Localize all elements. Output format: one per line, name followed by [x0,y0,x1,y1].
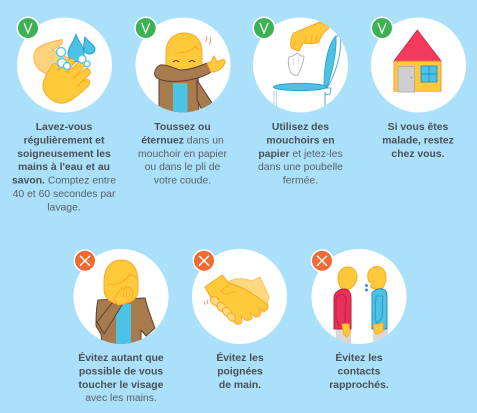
icon: cross badge [192,249,216,272]
panel: avoid close contact [310,249,406,391]
text block: Si vous êtes [388,122,449,133]
text block: dans une poubelle [258,162,343,173]
text block: éternuez dans un [141,135,224,146]
icon: check badge [370,16,394,40]
text block: avec les mains. [85,393,157,404]
icon: check badge [134,16,157,40]
text block: malade, restez [382,135,454,146]
text block: Lavez-vous [36,122,93,133]
panel: cough in elbow [134,16,230,187]
text block [138,122,228,187]
panel: avoid touching face [74,249,168,404]
text block: mains à l'eau et au [18,162,110,173]
text block: poignées [217,366,263,377]
text block: rapprochés. [329,380,389,391]
text block: votre coude. [154,176,211,187]
text block: Évitez autant que [78,351,164,364]
text block: ou dans le pli de [145,162,221,173]
icon: hand dropping tissue into bin [274,22,341,112]
icon: hands and water [34,34,95,103]
icon: house [394,30,441,92]
text block [216,351,264,391]
text block [78,351,164,404]
text block: possible de vous [79,366,163,377]
panel: avoid handshakes [192,249,287,391]
icon: person sneezing into elbow [155,33,225,115]
text block: chez vous. [391,149,445,160]
icon: handshake [204,275,269,324]
text block: lavage. [47,202,81,213]
text block: fermée. [283,176,318,187]
panel: stay home [370,16,466,160]
text block: de main. [219,380,261,391]
text block: régulièrement et [24,135,105,146]
text block [12,122,116,213]
text block: Toussez ou [154,122,211,133]
text block: soigneusement les [17,149,111,160]
icon: person touching face [96,260,155,345]
text block: Évitez les [216,351,264,364]
text block [258,122,343,187]
icon: cross badge [310,249,334,272]
text block: contacts [338,366,381,377]
text block: mouchoirs en [266,135,335,146]
icon: check badge [252,16,276,40]
text block: toucher le visage [79,380,164,391]
text block: savon. Comptez entre [12,176,116,187]
text block: papier et jetez-les [258,149,343,160]
panel: wash hands [12,16,116,213]
text block: mouchoir en papier [138,149,228,160]
text block [329,351,389,391]
text block: Évitez les [335,351,383,364]
icon: check badge [16,16,40,40]
icon: two people facing each other [334,266,388,347]
text block: Utilisez des [272,122,329,133]
panel: tissues [252,16,348,187]
text block [382,122,454,160]
icon: cross badge [74,249,96,272]
text block: 40 et 60 secondes par [13,189,116,200]
